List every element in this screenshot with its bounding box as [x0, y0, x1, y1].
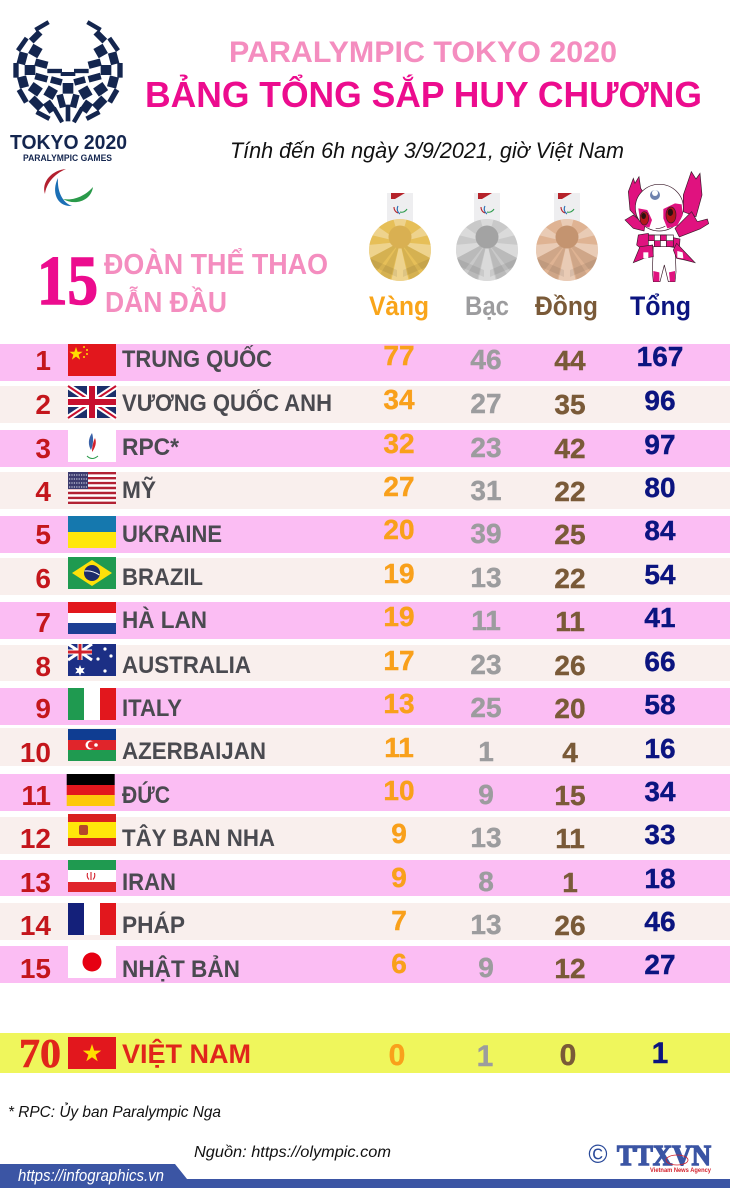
icon: silver medal: [455, 193, 519, 282]
row 5: Ukraine: 5: [35, 519, 51, 550]
flag: Japan: [68, 946, 116, 978]
flag: Spain: [68, 814, 116, 846]
row 14: Pháp: 13: [470, 909, 502, 940]
row 15: Nhật Bản: 9: [478, 952, 494, 983]
row 4: Mỹ: 80: [644, 472, 676, 503]
column header: Đồng: Đồng: [535, 291, 598, 321]
row 3: RPC: 97: [644, 429, 676, 460]
row 3: RPC: 3: [35, 433, 51, 464]
row 2: Vương quốc Anh: VƯƠNG QUỐC ANH: [122, 389, 332, 417]
row 15: Nhật Bản: 27: [644, 949, 676, 980]
row 15: Nhật Bản: 12: [554, 953, 586, 984]
row 6: Brazil: 54: [644, 559, 676, 590]
icon: Someity mascot: [625, 172, 709, 282]
row 6: Brazil: 19: [383, 558, 415, 589]
row 1: Trung Quốc: 1: [35, 345, 51, 376]
row 5: Ukraine: UKRAINE: [122, 521, 222, 548]
row 6: Brazil: BRAZIL: [122, 564, 203, 591]
agency name: TTXVN: [617, 1141, 711, 1172]
row 14: Pháp: 46: [644, 906, 676, 937]
row 14: Pháp: 14: [20, 910, 51, 941]
row 7: Hà Lan: HÀ LAN: [122, 606, 207, 634]
row 11: Đức: 34: [644, 776, 676, 807]
subtitle: date: Tính đến 6h ngày 3/9/2021, giờ Việt Nam: [230, 138, 624, 163]
row 8: Australia: 23: [470, 649, 502, 680]
row 2: Vương quốc Anh: 35: [554, 389, 586, 420]
row 13: Iran: 1: [562, 867, 578, 898]
row 15: Nhật Bản: 15: [20, 953, 51, 984]
heading line 2: DẪN ĐẦU: [105, 285, 227, 319]
row 6: Brazil: 6: [35, 563, 51, 594]
flag: United Kingdom: [68, 386, 116, 418]
row 8: Australia: 26: [554, 650, 586, 681]
flag: Germany: [67, 774, 115, 806]
row 9: Italy: ITALY: [122, 695, 182, 722]
row 14: Pháp: 7: [391, 905, 407, 936]
row 7: Hà Lan: 41: [644, 602, 676, 633]
row 11: Đức: 9: [478, 779, 494, 810]
row 2: Vương quốc Anh: 2: [35, 389, 51, 420]
column header: Vàng: Vàng: [369, 291, 429, 321]
row 5: Ukraine: [0, 514, 730, 553]
row 13: Iran: 13: [20, 867, 51, 898]
row 10: Azerbaijan: 10: [20, 737, 51, 768]
row 10: Azerbaijan: 4: [562, 737, 578, 768]
icon: agitos: [44, 169, 93, 206]
logo: TTXVN: [588, 1139, 712, 1174]
row 10: Azerbaijan: 11: [384, 732, 414, 763]
flag: Italy: [68, 688, 116, 720]
row 5: Ukraine: 25: [554, 519, 586, 550]
row 8: Australia: [0, 644, 730, 682]
column header: Bạc: Bạc: [465, 291, 509, 321]
row 12: Tây Ban Nha: 11: [555, 823, 585, 854]
icon: bronze medal: [535, 193, 599, 282]
row 7: Hà Lan: 11: [471, 605, 501, 636]
row 1: Trung Quốc: [0, 340, 730, 381]
row 3: RPC: 32: [383, 428, 415, 459]
row 3: RPC: RPC*: [122, 434, 180, 461]
row 12: Tây Ban Nha: [0, 814, 730, 854]
row 11: Đức: 15: [554, 780, 586, 811]
row 12: Tây Ban Nha: 13: [470, 822, 502, 853]
row 2: Vương quốc Anh: 96: [644, 385, 676, 416]
title: Bảng tổng sắp huy chương: BẢNG TỔNG SẮP HUY CHƯƠNG: [145, 72, 702, 115]
row 7: Hà Lan: 7: [35, 607, 51, 638]
row 9: Italy: 58: [644, 689, 676, 720]
flag: Australia: [68, 644, 116, 676]
row 11: Đức: 11: [21, 780, 51, 811]
row 12: Tây Ban Nha: 9: [391, 818, 407, 849]
row 6: Brazil: 13: [470, 562, 502, 593]
name: Việt Nam: VIỆT NAM: [122, 1038, 251, 1069]
flag: United States: [68, 472, 116, 504]
row 9: Italy: [0, 688, 730, 725]
row 8: Australia: 66: [644, 646, 676, 677]
medal counts: 1: [477, 1040, 493, 1073]
footer bar: [0, 1164, 730, 1188]
row 1: Trung Quốc: TRUNG QUỐC: [122, 345, 272, 373]
flag: Vietnam: [68, 1037, 116, 1069]
row 13: Iran: [0, 860, 730, 898]
row 3: RPC: 42: [554, 433, 586, 464]
website url: https://infographics.vn: [18, 1166, 164, 1185]
row 4: Mỹ: [0, 471, 730, 509]
flag: Brazil: [68, 557, 116, 589]
flag: China: [68, 344, 116, 376]
row 9: Italy: 20: [554, 693, 586, 724]
row 1: Trung Quốc: 46: [470, 344, 502, 375]
source: Nguồn: https://olympic.com: [194, 1144, 391, 1161]
flag: Ukraine: [68, 516, 116, 548]
row 15: Nhật Bản: 6: [391, 948, 407, 979]
row 2: Vương quốc Anh: [0, 384, 730, 423]
row 5: Ukraine: 20: [383, 514, 415, 545]
row 12: Tây Ban Nha: 33: [644, 819, 676, 850]
row 11: Đức: 10: [383, 775, 415, 806]
copyright mark: ©: [588, 1139, 608, 1169]
row 5: Ukraine: 84: [644, 515, 676, 546]
icon: gold medal: [368, 193, 432, 282]
row 14: Pháp: PHÁP: [122, 911, 185, 939]
row 1: Trung Quốc: 77: [383, 340, 415, 371]
row 11: Đức: ĐỨC: [122, 781, 170, 809]
row 8: Australia: 17: [383, 645, 415, 676]
row 4: Mỹ: 27: [383, 471, 415, 502]
row 14: Pháp: 26: [554, 910, 586, 941]
row 9: Italy: 9: [35, 693, 51, 724]
row 10: Azerbaijan: [0, 728, 730, 768]
footnote: RPC: * RPC: Ủy ban Paralympic Nga: [8, 1102, 221, 1121]
row 4: Mỹ: MỸ: [122, 476, 156, 504]
row 4: Mỹ: 31: [470, 475, 502, 506]
medal counts: 0: [560, 1039, 576, 1072]
row 6: Brazil: 22: [554, 563, 586, 594]
row 15: Nhật Bản: [0, 946, 730, 984]
row 10: Azerbaijan: 1: [478, 736, 494, 767]
title: Paralympic Tokyo 2020: PARALYMPIC TOKYO 2020: [229, 36, 617, 69]
row 2: Vương quốc Anh: 27: [470, 388, 502, 419]
row 8: Australia: 8: [35, 651, 51, 682]
row 13: Iran: 8: [478, 866, 494, 897]
icon: orbit: [666, 1155, 688, 1165]
heading: 15 leading delegations: [37, 243, 328, 320]
logo text: Paralympic Games: PARALYMPIC GAMES: [23, 153, 112, 163]
rank 70: 70: [19, 1030, 61, 1076]
row 15: Nhật Bản: NHẬT BẢN: [122, 954, 240, 983]
row 9: Italy: 25: [470, 692, 502, 723]
row 2: Vương quốc Anh: 34: [383, 384, 415, 415]
medal counts: 0: [389, 1039, 405, 1072]
row 7: Hà Lan: 19: [383, 601, 415, 632]
row 10: Azerbaijan: 16: [644, 733, 676, 764]
flag: France: [68, 903, 116, 935]
flag: Azerbaijan: [68, 729, 116, 761]
row 13: Iran: 9: [391, 862, 407, 893]
column header: Tổng: Tổng: [630, 291, 691, 321]
row 14: Pháp: [0, 903, 730, 941]
row 1: Trung Quốc: 167: [637, 341, 683, 372]
agency tagline: Vietnam News Agency: [650, 1168, 712, 1174]
logo: Tokyo 2020 Paralympic Games: [10, 21, 127, 206]
row 7: Hà Lan: 11: [555, 606, 585, 637]
row 3: RPC: 23: [470, 432, 502, 463]
row 4: Mỹ: 22: [554, 476, 586, 507]
row 10: Azerbaijan: AZERBAIJAN: [122, 738, 266, 765]
row: Việt Nam highlight: [0, 1030, 730, 1076]
row 13: Iran: 18: [644, 863, 676, 894]
flag: RPC emblem: [68, 430, 116, 462]
heading line 1: ĐOÀN THỂ THAO: [104, 247, 328, 281]
row 4: Mỹ: 4: [35, 476, 51, 507]
row 3: RPC: [0, 428, 730, 467]
big number 15: 15: [37, 243, 98, 320]
row 13: Iran: IRAN: [122, 869, 176, 896]
logo text: Tokyo 2020: TOKYO 2020: [10, 132, 127, 154]
row 6: Brazil: [0, 557, 730, 595]
medal counts: [389, 1037, 668, 1073]
row 8: Australia: AUSTRALIA: [122, 652, 251, 679]
row 12: Tây Ban Nha: TÂY BAN NHA: [122, 824, 275, 852]
row 12: Tây Ban Nha: 12: [20, 823, 51, 854]
row 9: Italy: 13: [383, 688, 415, 719]
row 11: Đức: [0, 774, 730, 811]
row 1: Trung Quốc: 44: [554, 345, 586, 376]
flag: Iran: [68, 860, 116, 892]
icon: checkered wreath: [14, 21, 122, 122]
row 5: Ukraine: 39: [470, 518, 502, 549]
medal counts: 1: [652, 1037, 668, 1070]
row 7: Hà Lan: [0, 601, 730, 639]
flag: Netherlands: [68, 602, 116, 634]
